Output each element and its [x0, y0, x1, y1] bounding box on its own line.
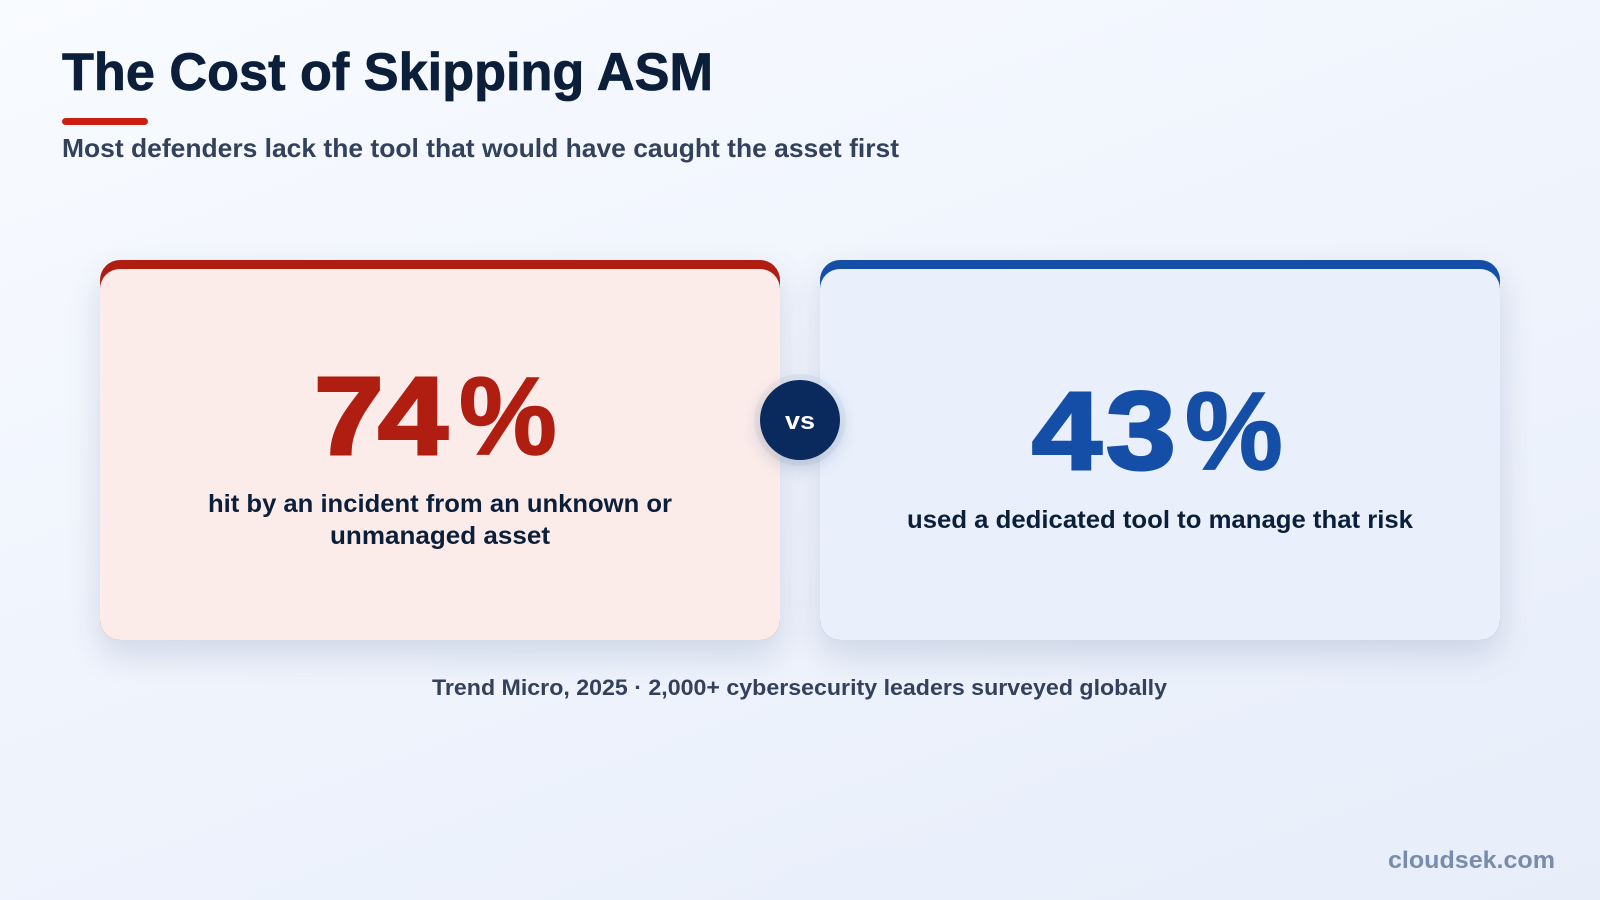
card face: blue panel — [820, 269, 1500, 640]
stat: 43%: 4 — [1032, 369, 1102, 492]
card face: red panel — [100, 269, 780, 640]
description: hit by an incident: unmanaged asset — [330, 522, 551, 550]
stat: 43% — [1032, 369, 1283, 493]
title underline accent — [62, 118, 148, 125]
source note: Trend Micro, 2025 · 2,000+ cybersecurity leaders surveyed globally — [432, 675, 1168, 700]
brand url: cloudsek.com — [1388, 847, 1555, 874]
panel: 74% incident card — [100, 260, 780, 640]
description: hit by an incident — [208, 490, 672, 550]
description: hit by an incident: hit by an incident from an unknown or — [208, 490, 672, 518]
subtitle: Most defenders lack the tool that would have caught the asset first — [62, 133, 899, 163]
panel: 43% dedicated tool card — [820, 260, 1500, 640]
stat: 74%: 4 — [378, 354, 448, 477]
stat: 74%: 7 — [314, 354, 384, 477]
title: The Cost of Skipping ASM — [62, 43, 713, 102]
stat: 43%: 3 — [1106, 369, 1176, 492]
stat: 74%: % — [459, 355, 557, 478]
vs label: vs — [785, 408, 815, 435]
description: used a dedicated tool: used a dedicated tool to manage that risk — [907, 506, 1413, 534]
vs badge — [760, 380, 840, 460]
stat: 74% — [314, 354, 557, 478]
stat: 43%: % — [1185, 370, 1283, 493]
